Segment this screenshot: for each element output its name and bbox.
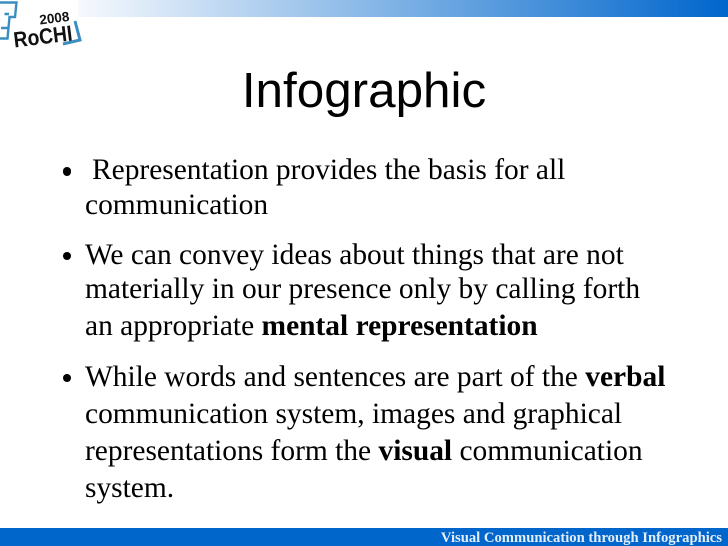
bullet 3: system. [85,472,174,504]
top gradient bar [78,0,728,17]
bullet 3 [63,361,665,504]
footer bar [0,528,728,546]
bullet 2 [63,239,640,342]
bullet 1 [63,154,565,221]
footer text: Visual Communication through Infographics [441,530,722,546]
bullet 2: an appropriate mental representation [85,310,538,342]
bullet 3: representations form the visual communication [85,435,643,467]
logo: RoCHI 2008 [0,1,82,52]
bullet 1: Representation provides the basis for all [92,154,565,186]
bullet 2: materially in our presence only by calling forth [85,273,640,305]
logo: RoCHI 2008: 2008 [39,9,71,27]
bullet 2: We can convey ideas about things that are not [85,239,624,271]
bullet 3: communication system, images and graphical [85,398,622,430]
bullet 3: While words and sentences are part of the verbal [85,361,665,393]
title: Infographic [242,63,486,118]
logo: RoCHI 2008: RoCHI [12,20,74,52]
bullet 1: communication [85,189,268,221]
